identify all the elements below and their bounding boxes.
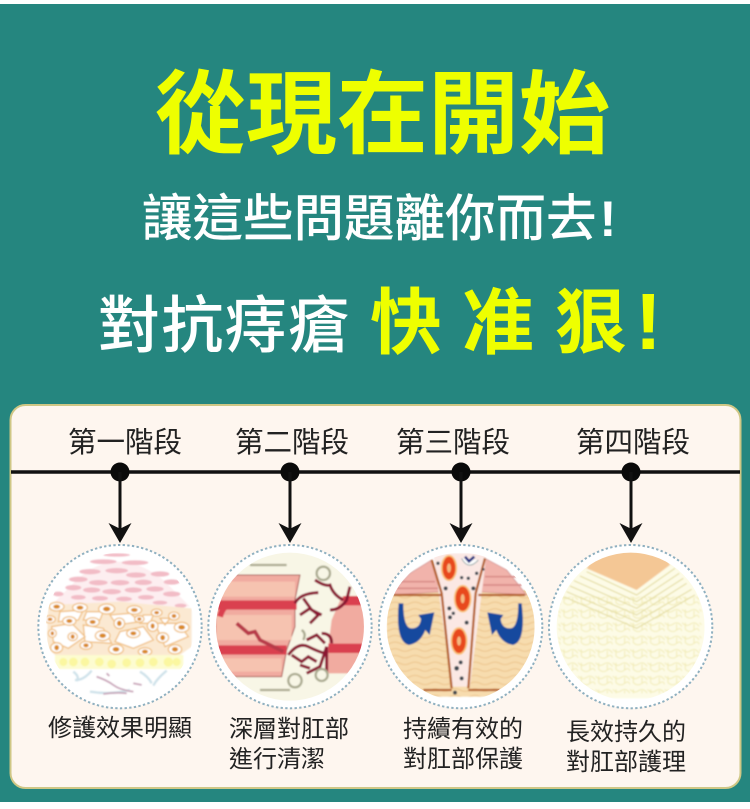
caption: stage two: 進行清潔 bbox=[229, 739, 325, 774]
caption: stage four: 對肛部護理 bbox=[566, 742, 686, 777]
illustration: stage three continued protection bbox=[379, 545, 542, 708]
stage labels: 第二階段 bbox=[235, 420, 349, 461]
slogan: 准 bbox=[462, 264, 534, 369]
caption: stage two: 深層對肛部 bbox=[229, 709, 349, 744]
panel: four stages bbox=[10, 405, 740, 788]
caption: stage three: 持續有效的 bbox=[403, 709, 523, 744]
stage labels: 第一階段 bbox=[68, 420, 182, 461]
slogan bbox=[98, 264, 662, 369]
caption: stage three bbox=[403, 709, 523, 774]
caption: stage four: 長效持久的 bbox=[566, 712, 686, 747]
slogan: 對抗痔瘡 bbox=[98, 275, 350, 365]
slogan: 快 bbox=[370, 264, 442, 369]
arrows bbox=[108, 472, 642, 543]
stage labels: 第三階段 bbox=[396, 420, 510, 461]
illustration: stage one skin layers bbox=[38, 545, 202, 708]
caption: stage one: 修護效果明顯 bbox=[48, 708, 192, 743]
caption: stage three: 對肛部保護 bbox=[403, 739, 523, 774]
captions bbox=[48, 708, 686, 777]
title: 從現在開始 bbox=[155, 41, 610, 173]
stage labels: 第四階段 bbox=[576, 420, 690, 461]
caption: stage four bbox=[566, 712, 686, 777]
slogan: 狠 bbox=[555, 264, 627, 369]
slogan: ! bbox=[635, 277, 662, 366]
heading block bbox=[98, 41, 662, 369]
stage labels bbox=[68, 420, 690, 461]
caption: stage two bbox=[229, 709, 349, 774]
subtitle: 讓這些問題離你而去! bbox=[142, 177, 616, 251]
timeline bbox=[11, 462, 740, 482]
illustration: stage four long-term care bbox=[549, 545, 712, 708]
illustration: stage two deep cleansing bbox=[208, 545, 372, 708]
